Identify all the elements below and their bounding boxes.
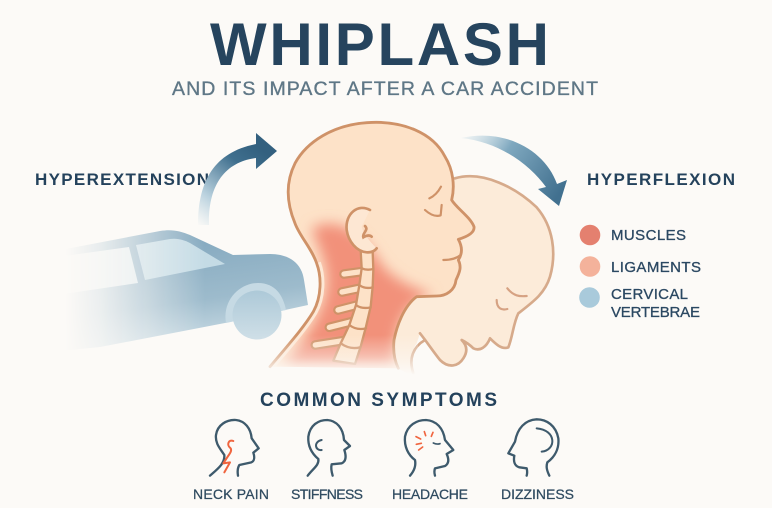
title: WHIPLASH	[210, 11, 549, 78]
neck muscle glow	[270, 224, 433, 367]
neck bottom fade	[262, 335, 418, 385]
arrow: hyperflexion	[461, 136, 567, 206]
symptom icon: headache	[405, 420, 453, 476]
ear	[347, 208, 377, 252]
subtitle: AND ITS IMPACT AFTER A CAR ACCIDENT	[172, 78, 598, 100]
flexed head eye and brow	[497, 288, 527, 310]
label: hyperflexion: HYPERFLEXION	[587, 170, 735, 189]
legend item: cervical vertebrae	[579, 286, 700, 321]
car wheel	[225, 283, 286, 340]
legend item: cervical vertebrae: VERTEBRAE	[611, 304, 700, 321]
symptom label: headache: HEADACHE	[392, 486, 468, 502]
legend	[579, 225, 701, 321]
arrow: hyperextension	[198, 133, 277, 225]
legend item: ligaments: LIGAMENTS	[611, 259, 701, 276]
car	[80, 230, 308, 348]
legend item: muscles: MUSCLES	[611, 227, 686, 244]
label: hyperextension: HYPEREXTENSION	[35, 170, 209, 189]
spine: cervical vertebrae	[315, 251, 373, 364]
heading: common symptoms: COMMON SYMPTOMS	[260, 390, 497, 411]
car windows	[85, 238, 225, 290]
symptom icon: dizziness	[508, 419, 558, 476]
upright head outline	[270, 122, 474, 368]
flexed head silhouette	[370, 176, 553, 377]
symptom label: dizziness: DIZZINESS	[501, 486, 574, 502]
symptom label: stiffness: STIFFNESS	[291, 486, 363, 502]
upright head fill	[270, 122, 474, 368]
illustration: whiplash head and neck	[270, 122, 553, 377]
symptom icon: stiffness	[308, 420, 350, 476]
symptom label: neck pain: NECK PAIN	[193, 486, 269, 502]
legend item: cervical vertebrae: CERVICAL	[611, 286, 688, 303]
closed eye, brow and mouth	[425, 187, 461, 260]
symptom icon: neck pain	[210, 420, 259, 476]
